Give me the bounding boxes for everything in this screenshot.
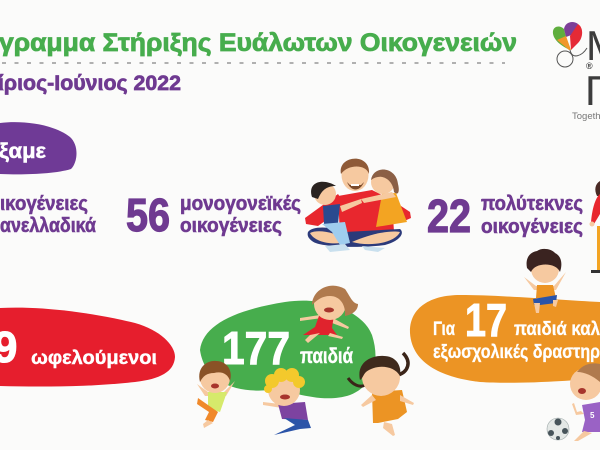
illustration: curly-haired boy sitting	[524, 249, 566, 313]
stat: families nationwide: ανελλαδικά	[0, 214, 96, 237]
badge: purple heading	[0, 122, 76, 174]
boy on lap	[323, 204, 340, 224]
stat: 22 large families: πολύτεκνες	[481, 192, 583, 215]
stat: 56 single-parent families: μονογονεϊκές	[180, 192, 301, 215]
stat: families nationwide: ικογένειες	[0, 192, 88, 215]
illustration: blond boy in purple	[263, 368, 311, 435]
feet	[325, 244, 350, 252]
badge: purple heading: ξαμε	[0, 140, 46, 163]
stat: 56 single-parent families: 56	[126, 189, 170, 241]
stat: 56 single-parent families: οικογένειες	[180, 214, 282, 237]
illustration: girl in red dress	[300, 286, 358, 343]
callout: extracurricular activities: Για	[433, 319, 455, 340]
father head	[342, 159, 368, 191]
title: γραμμα Στήριξης Ευάλωτων Οικογενειών	[0, 29, 517, 57]
girl on lap	[371, 170, 395, 194]
illustration: boy playing football: 5	[590, 411, 595, 420]
father crossed legs	[308, 228, 402, 247]
callout: children: 177	[222, 322, 290, 374]
icon: puzzle heart balloon	[553, 22, 587, 67]
registered mark: ®	[586, 61, 593, 71]
icon: football	[547, 418, 569, 440]
illustration: father with two children	[305, 159, 411, 252]
stat: 22 large families	[427, 190, 583, 242]
callout: beneficiaries: ωφελούμενοι	[31, 348, 157, 369]
illustration: cropped parent at right edge	[590, 181, 600, 273]
stat: 22 large families: οικογένειες	[481, 215, 583, 238]
callout: beneficiaries	[0, 308, 175, 387]
stat: families nationwide	[0, 192, 96, 237]
illustration: girl with braids in orange	[348, 353, 414, 436]
illustration: boy in orange shorts	[197, 361, 235, 428]
callout: extracurricular activities	[410, 294, 600, 383]
subtitle: period: ίριος-Ιούνιος 2022	[0, 72, 181, 95]
stat: 22 large families: 22	[427, 190, 471, 242]
father torso and arms	[338, 190, 394, 236]
callout: children: παιδιά	[300, 345, 353, 368]
callout: extracurricular activities: 17	[465, 294, 507, 346]
stat: 56 single-parent families	[126, 189, 301, 241]
callout: children	[200, 301, 376, 398]
logo	[553, 22, 600, 122]
illustration: boy playing football	[570, 363, 600, 441]
